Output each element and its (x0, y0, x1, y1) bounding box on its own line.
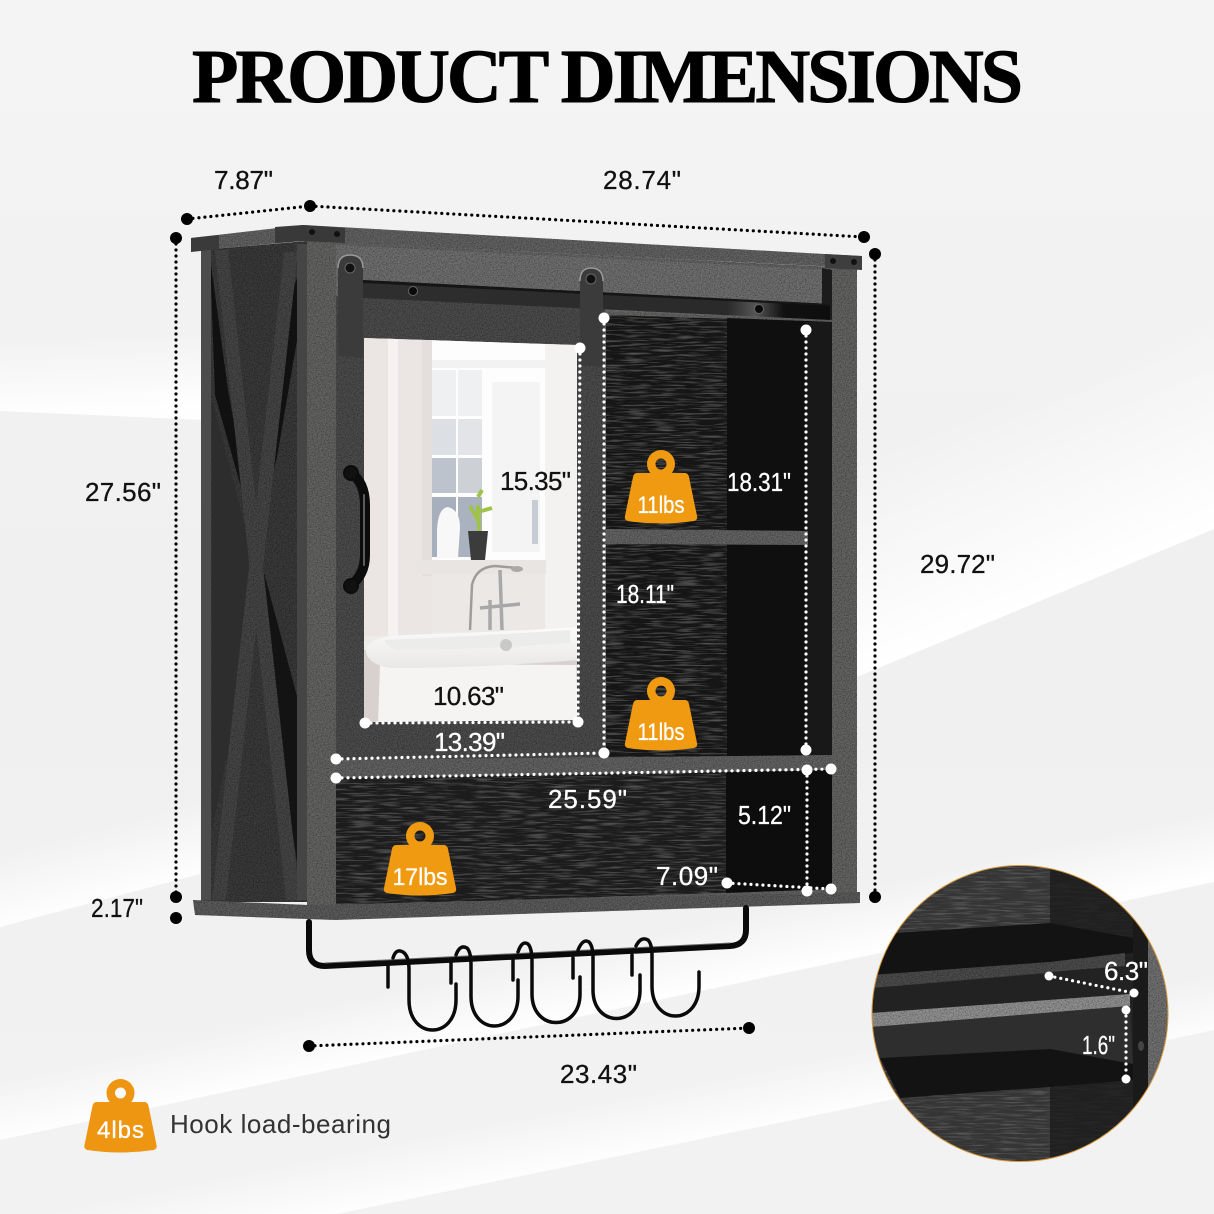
mirror height line (572, 342, 586, 728)
lens line 1.6 (1122, 1006, 1130, 1084)
barn door hanger: left (338, 255, 363, 358)
door handle (344, 466, 365, 593)
lower compartment width line (330, 764, 836, 784)
weight icon: middle shelf 11lbs: 11lbs (638, 719, 684, 746)
legend (84, 1079, 391, 1152)
door height line (598, 312, 610, 753)
hook 5 (632, 939, 699, 1016)
bottom board (193, 892, 860, 920)
towel rail and hooks (309, 908, 746, 1030)
middle shelf (336, 755, 832, 778)
upper shelf height line (800, 324, 812, 756)
label 28.74: 28.74" (603, 165, 681, 195)
upper back panel (336, 245, 832, 320)
weight icon: middle shelf 11lbs (625, 677, 697, 750)
label 27.56: 27.56" (85, 477, 161, 507)
door width line (330, 748, 610, 764)
door panel (336, 296, 605, 762)
cabinet (191, 225, 862, 920)
label 5.12: 5.12" (738, 800, 791, 830)
hook 4 (573, 941, 640, 1018)
detail lens (872, 865, 1168, 1162)
label 23.43: 23.43" (560, 1059, 637, 1089)
weight icon: upper shelf 11lbs: 11lbs (638, 492, 684, 519)
weight icon: bottom shelf 17lbs: 17lbs (392, 864, 448, 891)
rail width line 23.43 (303, 1022, 755, 1052)
barn door hanger: right (580, 268, 603, 367)
label 29.72: 29.72" (920, 549, 995, 579)
side panel with X bracing (201, 241, 307, 902)
lower compartment (336, 770, 832, 906)
weight icon: upper shelf 11lbs (625, 450, 697, 524)
left height line 27.56 (170, 232, 182, 924)
lens label 1.6: 1.6" (1082, 1030, 1115, 1060)
weight icon: bottom shelf 17lbs (384, 822, 456, 896)
dimension labels (85, 165, 995, 1089)
top board (191, 225, 862, 270)
lower compartment height and depth lines (722, 770, 836, 896)
sliding door rail (363, 280, 830, 320)
right height line 29.72 (869, 248, 881, 903)
label 15.35: 15.35" (500, 466, 571, 496)
upper open compartment (605, 315, 832, 760)
weight icon: hook 4lbs: 4lbs (97, 1117, 144, 1144)
title: PRODUCT DIMENSIONS (192, 35, 1023, 119)
width line 28.74 (310, 206, 870, 243)
label 25.59: 25.59" (548, 784, 627, 814)
hook 2 (451, 947, 518, 1026)
cabinet front frame (307, 241, 857, 907)
towel rail (309, 908, 746, 966)
lens line 6.3 (1044, 972, 1138, 998)
hook 3 (513, 943, 580, 1022)
white dimension lines (330, 312, 836, 896)
label 2.17: 2.17" (91, 893, 143, 923)
black dimension lines (170, 200, 881, 1052)
mirror width line (360, 718, 578, 728)
legend text: Hook load-bearing (170, 1109, 391, 1139)
label 7.09: 7.09" (656, 861, 718, 891)
mirror (364, 336, 578, 724)
label 13.39: 13.39" (434, 727, 505, 757)
depth line 7.87 (181, 200, 316, 225)
label 18.31: 18.31" (727, 467, 791, 497)
label 7.87: 7.87" (214, 165, 273, 195)
label 10.63: 10.63" (433, 681, 504, 711)
weight icon: hook 4lbs (84, 1079, 157, 1152)
lens label 6.3: 6.3" (1104, 956, 1148, 986)
hook 1 (388, 951, 456, 1030)
label 18.11: 18.11" (616, 579, 674, 609)
